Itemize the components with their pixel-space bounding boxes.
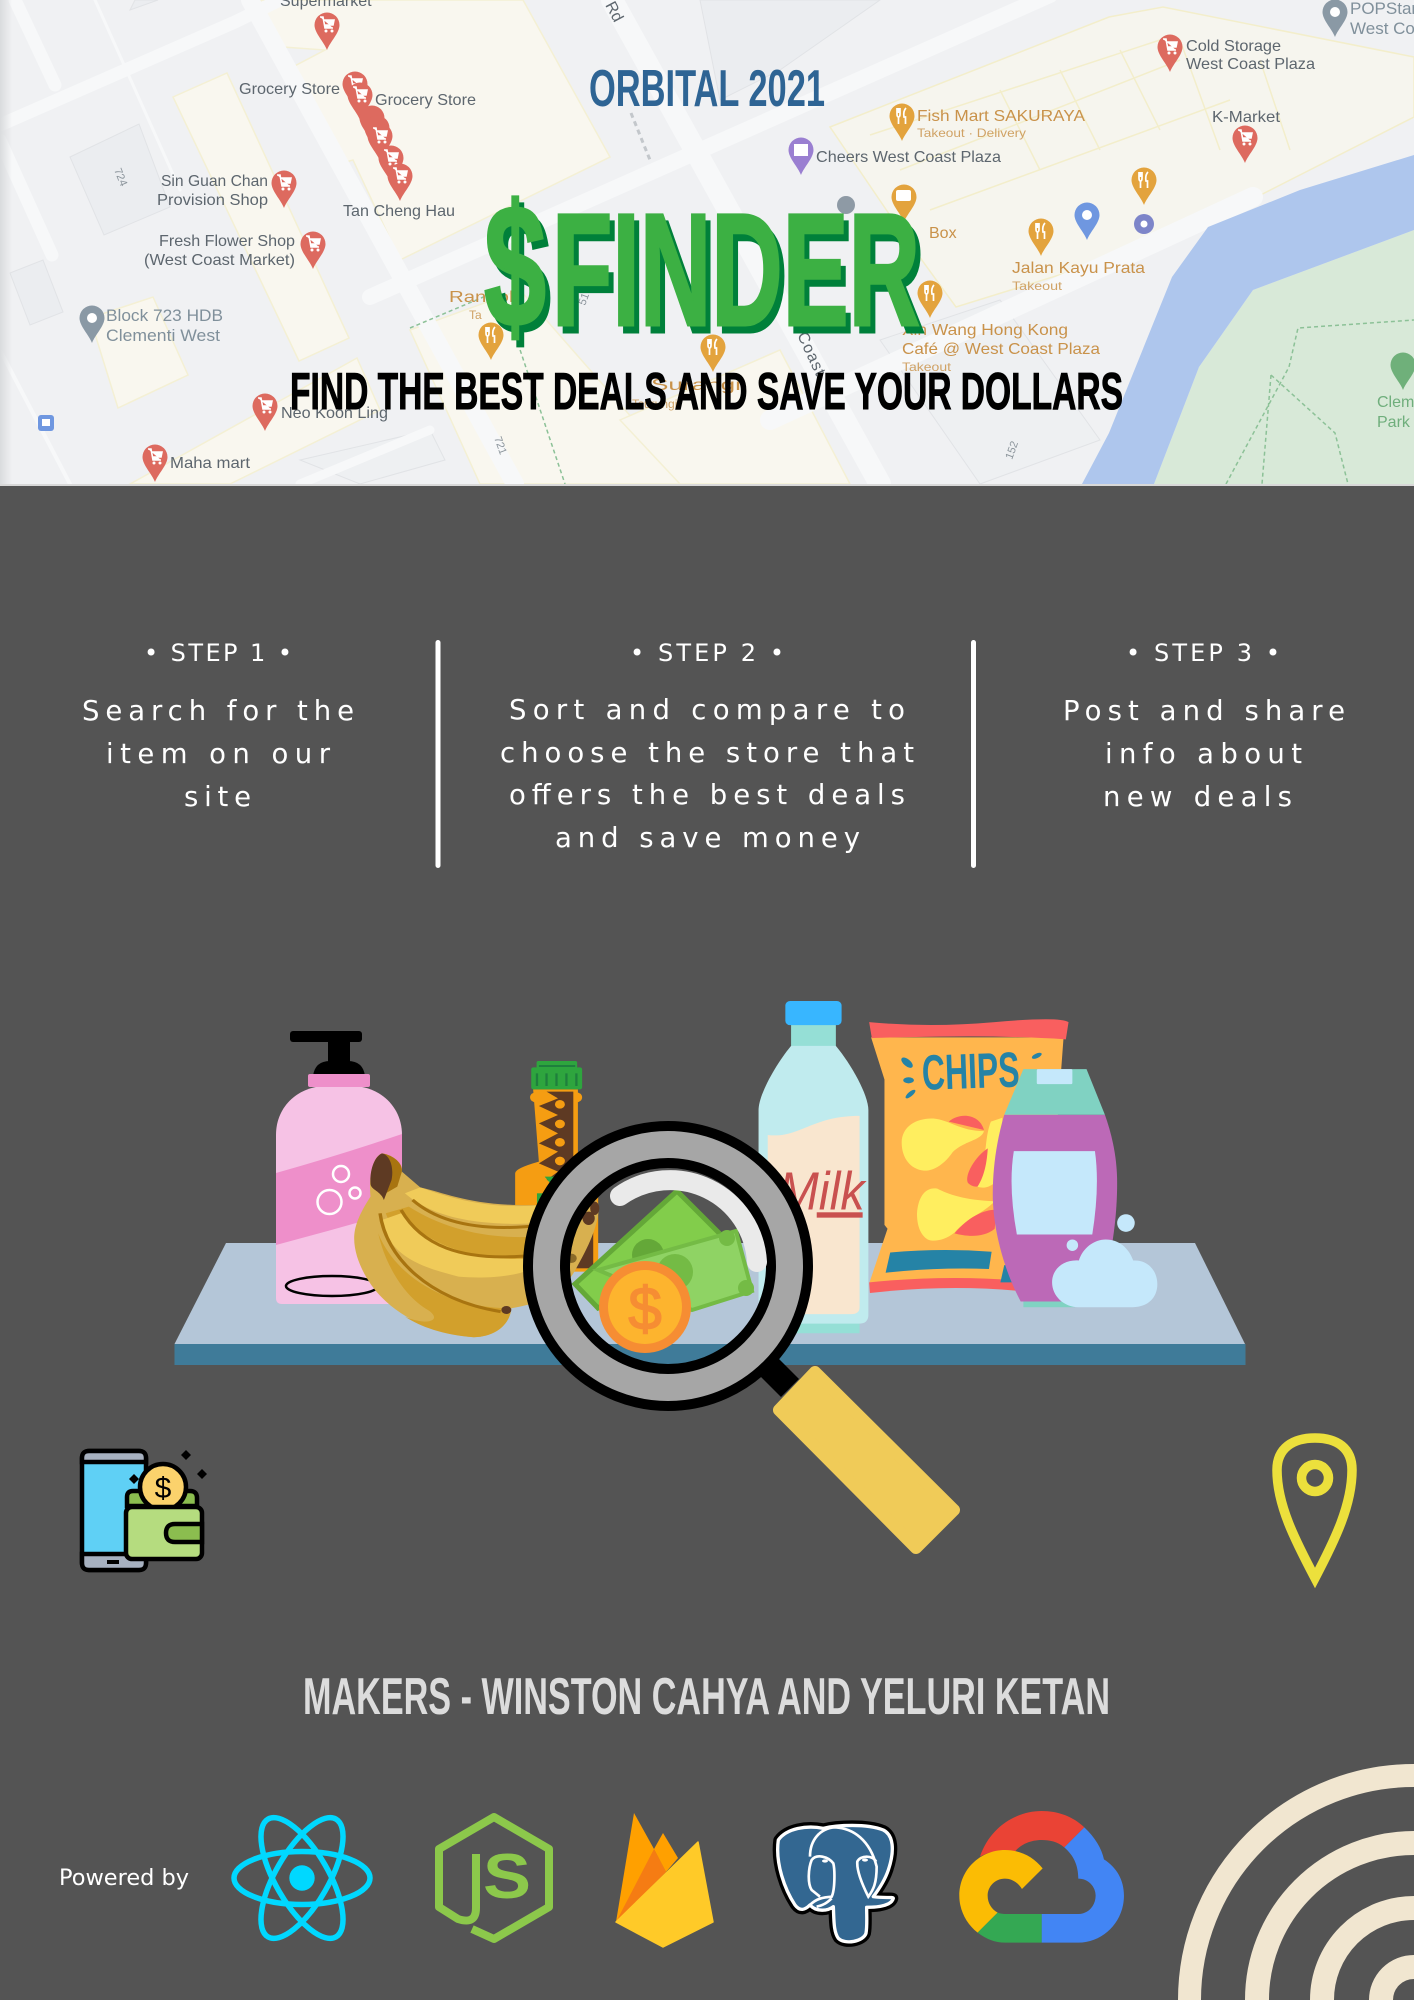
- map other pins: [38, 0, 1414, 431]
- map orange pins: [478, 104, 1156, 372]
- decorative concentric arcs: [1190, 1776, 1414, 2000]
- icon: phone wallet: [82, 1450, 207, 1570]
- logo: postgresql: [778, 1825, 893, 1942]
- map place labels: Takeout · Delivery: [917, 126, 1026, 140]
- icon: magnifying glass: [528, 1126, 954, 1548]
- divider right: [971, 640, 976, 868]
- map place labels: Grocery Store: [239, 81, 340, 98]
- step 3 text: info about: [1105, 738, 1302, 770]
- map plaza complex: [830, 7, 1414, 307]
- step 1 text: Search for the: [82, 695, 354, 727]
- step 3 text: [1063, 695, 1345, 813]
- map place labels: Cold Storage: [1186, 38, 1281, 55]
- illustration: shelf with groceries: [174, 1001, 1246, 1548]
- map grey buildings: [10, 0, 1100, 484]
- map place labels: Fish Mart SAKURAYA: [917, 108, 1085, 125]
- map road dashes: [631, 113, 650, 160]
- map place labels: K-Market: [1212, 109, 1281, 126]
- map place labels: Rangoli: [449, 289, 518, 306]
- soap foam cloud: [1052, 1214, 1157, 1307]
- map place labels: Park: [1377, 414, 1411, 431]
- icon: banknotes: [575, 1191, 754, 1310]
- icon: dollar coin: $: [628, 1275, 662, 1342]
- logo: node js: S: [483, 1842, 531, 1912]
- step 2 text: [500, 694, 914, 854]
- soap pump bottle: [276, 1031, 402, 1304]
- map place labels: Tsurungi: [632, 397, 677, 411]
- coin dollar sign: $: [155, 1472, 172, 1505]
- map place labels: Box: [929, 225, 957, 242]
- title shadow letters: FINDER: [557, 187, 925, 366]
- milk label: Milk: [778, 1163, 867, 1222]
- step 2 text: Sort and compare to: [509, 694, 905, 726]
- icon: dollar coin: [599, 1261, 691, 1353]
- phone: [82, 1451, 146, 1570]
- map place labels: (West Coast Market): [144, 252, 295, 269]
- step 1 text: item on our: [106, 738, 331, 770]
- purple shampoo bottle: [993, 1069, 1117, 1307]
- logo: node js: [439, 1817, 549, 1939]
- map place labels: Block 723 HDB: [106, 306, 223, 325]
- map place labels: Café @ West Coast Plaza: [902, 341, 1100, 358]
- panel: step 2: [500, 639, 914, 854]
- step 2 text: choose the store that: [500, 737, 914, 769]
- milk bottle: [759, 1001, 868, 1333]
- map place labels: [106, 0, 1414, 472]
- panel: step 3: [1063, 639, 1345, 813]
- map building blocks: [90, 0, 850, 484]
- shelf: [174, 1243, 1246, 1365]
- map place labels: 51: [577, 291, 592, 307]
- panel: step 1: [82, 639, 354, 813]
- map bottom edge: [0, 484, 1414, 486]
- map place labels: Neo Koon Ling: [281, 405, 388, 422]
- map place labels: West Coast Plaza: [1186, 56, 1315, 73]
- powered by label: Powered by: [59, 1866, 189, 1891]
- sparkles: [129, 1450, 207, 1484]
- title shadow dollar: $: [489, 175, 551, 370]
- title: $finder: [484, 168, 925, 370]
- logo: google cloud: [959, 1811, 1124, 1943]
- magnifier ring: [546, 1144, 790, 1388]
- map place labels: Clem: [1377, 394, 1414, 411]
- map red pins: [142, 12, 1258, 482]
- title main dollar: $: [484, 168, 546, 363]
- map place labels: 152: [1004, 440, 1021, 461]
- map place labels: Grocery Store: [375, 92, 476, 109]
- step 1 text: [82, 695, 354, 813]
- map place labels: Xin Wang Hong Kong: [902, 322, 1068, 339]
- wallet: [126, 1464, 202, 1559]
- icon: location pin: [1277, 1438, 1352, 1578]
- step 3 heading: • STEP 3 •: [1126, 639, 1280, 667]
- chips label: CHIPS: [921, 1042, 1020, 1101]
- map place labels: Tan Cheng Hau: [343, 203, 455, 220]
- step 3 text: new deals: [1103, 781, 1292, 813]
- map place labels: 724: [111, 167, 129, 188]
- map place labels: Surangi: [651, 377, 741, 394]
- map place labels: Maha mart: [170, 455, 251, 472]
- map place labels: Coast: [793, 330, 829, 379]
- step 2 text: offers the best deals: [509, 779, 905, 811]
- title main letters: FINDER: [552, 180, 920, 359]
- map place labels: Cheers West Coast Plaza: [816, 149, 1001, 166]
- step 2 heading: • STEP 2 •: [630, 639, 784, 667]
- step 1 text: site: [184, 781, 251, 813]
- map left edge shade: [0, 0, 8, 484]
- sauce bottle: [515, 1061, 598, 1272]
- map place labels: Takeout: [1012, 279, 1063, 293]
- map place labels: Jalan Kayu Prata: [1012, 260, 1145, 277]
- map place labels: Provision Shop: [157, 192, 268, 209]
- map place labels: Takeout: [902, 360, 952, 374]
- map place labels: Clementi West: [106, 326, 220, 345]
- chips bag: [869, 1019, 1069, 1293]
- map base: [0, 0, 1414, 484]
- map park paths: [410, 290, 1414, 484]
- map white roads: [259, 0, 1263, 484]
- title: orbital 2021: ORBITAL 2021: [589, 60, 825, 118]
- step 1 heading: • STEP 1 •: [144, 639, 292, 667]
- bananas: [354, 1153, 599, 1337]
- magnifier neck: [756, 1354, 799, 1397]
- logo: react: [234, 1806, 370, 1950]
- map place labels: Sin Guan Chan: [161, 173, 268, 190]
- map place labels: Ta: [469, 308, 482, 322]
- logo: firebase: [616, 1813, 713, 1947]
- map place labels: 721: [491, 435, 509, 456]
- map place labels: Fresh Flower Shop: [159, 233, 295, 250]
- step 2 text: and save money: [555, 822, 860, 854]
- step 3 text: Post and share: [1063, 695, 1345, 727]
- map park: [1154, 230, 1414, 484]
- divider left: [436, 640, 440, 868]
- panel: map header: [0, 0, 1414, 484]
- magnifier highlight: [620, 1180, 757, 1262]
- magnifier handle: [779, 1372, 954, 1548]
- map river: [1082, 155, 1414, 484]
